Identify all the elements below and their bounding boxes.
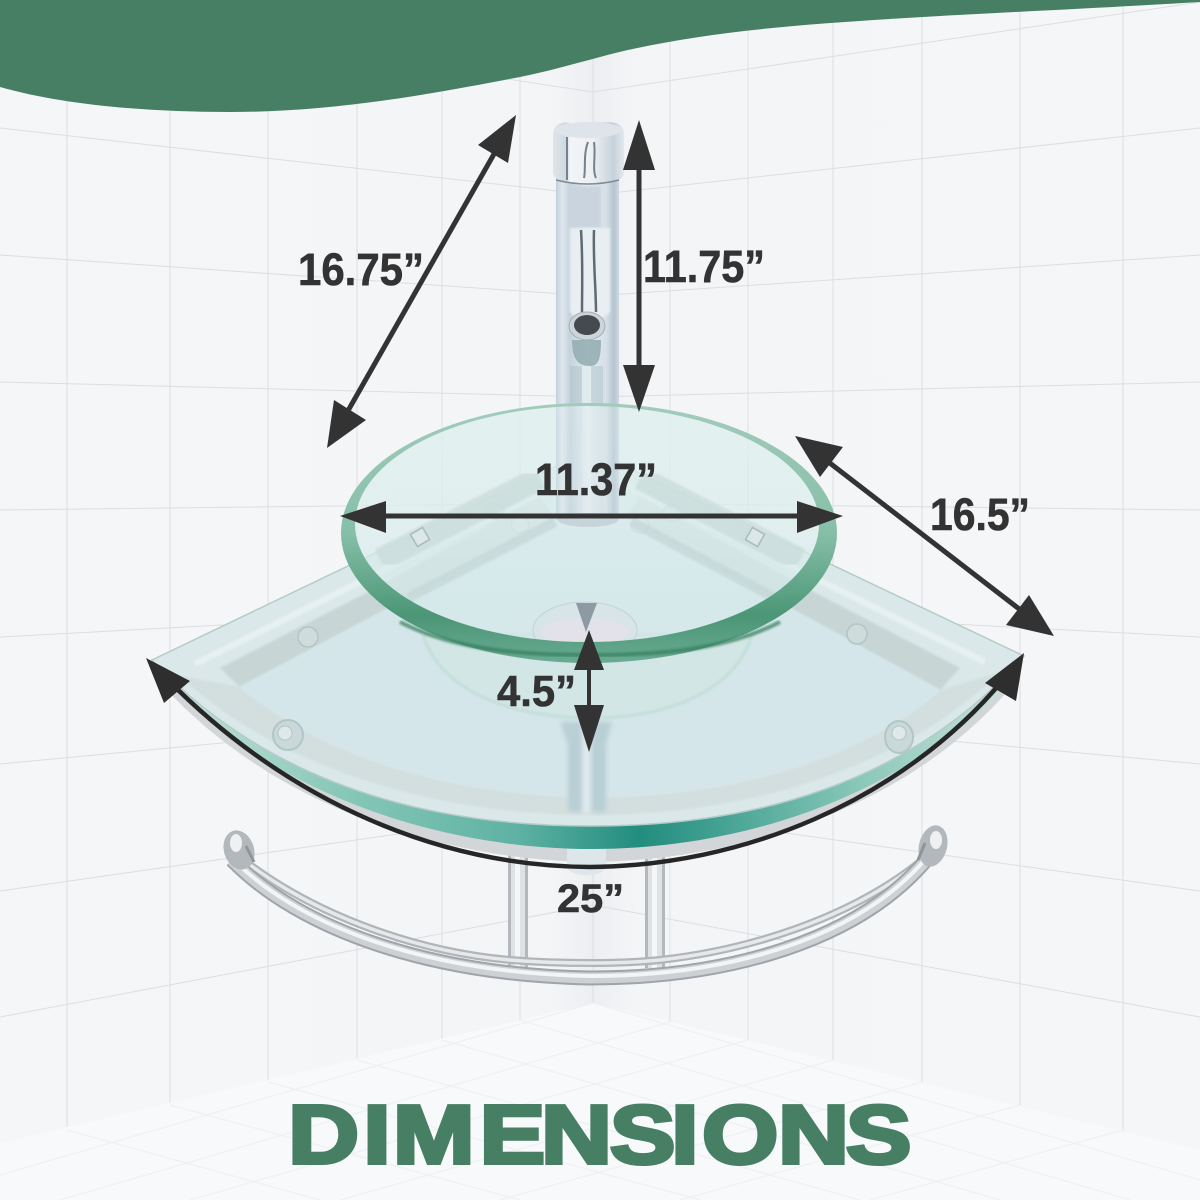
title: DIMENSIONS [288, 1089, 911, 1181]
faucet: handle stalk [581, 230, 596, 312]
arrow: bowl width 11.37 [340, 501, 843, 533]
bowl: visible frame through glass [380, 478, 800, 560]
shelf: straight steel band right [624, 496, 960, 690]
faucet: cap details [567, 137, 596, 180]
rail: inner tube [246, 862, 920, 963]
faucet: cap seam [556, 180, 619, 184]
arrow: bowl depth 4.5 [574, 630, 604, 752]
rail: outer tube [232, 856, 928, 978]
faucet: stem [556, 175, 619, 520]
towel rail [219, 822, 952, 978]
green wave header [0, 0, 1200, 112]
faucet: spout reflection [572, 340, 601, 366]
shelf: inner glass panel [240, 506, 940, 797]
rail: right ball end [914, 822, 952, 870]
faucet: cap top [554, 122, 622, 138]
shelf: steel underside [165, 670, 1012, 862]
shelf: screw left [273, 720, 303, 750]
rail: left ball end [219, 826, 259, 874]
bowl: dark front rim accent [400, 622, 780, 655]
shelf: straight steel band left [220, 496, 556, 687]
faucet: upper panel [569, 186, 601, 228]
label: 16.75: 16.75” [298, 244, 424, 295]
label: 16.5: 16.5” [930, 489, 1030, 540]
bowl: clips [410, 527, 765, 547]
bowl: interior [355, 405, 819, 645]
rail: support bars [508, 850, 665, 968]
label: 4.5: 4.5” [497, 667, 576, 716]
bowl: underside body [423, 635, 752, 718]
faucet [553, 122, 624, 520]
shelf: drain stub under shelf [567, 846, 606, 875]
faucet: white handle recess [570, 228, 610, 319]
arrow: faucet height 11.75 [623, 120, 655, 412]
arrow: side depth 16.5 [795, 436, 1054, 636]
background: tiled floor [0, 1003, 1200, 1200]
label: 11.75: 11.75” [643, 241, 765, 292]
bowl: faucet seen through [556, 405, 619, 527]
shelf: drain pipe below bowl [560, 722, 612, 812]
bowl: rim [341, 403, 837, 663]
faucet: aerator [569, 312, 605, 340]
shelf: teal front edge [150, 656, 1024, 849]
glass corner shelf [150, 450, 1024, 875]
shelf: curved steel band [180, 672, 1000, 815]
arrow: diagonal height 16.75 [327, 115, 516, 448]
shelf: glass top [152, 450, 1024, 826]
label: 11.37: 11.37” [535, 454, 657, 505]
shelf: frame highlights [195, 482, 985, 664]
glass vessel bowl [341, 403, 837, 718]
shelf: screw right [885, 721, 913, 753]
label: 25: 25” [557, 877, 624, 921]
arrow: front arc 25 [146, 653, 1024, 867]
bowl: drain [533, 602, 637, 658]
faucet: cap [553, 122, 624, 184]
shelf: back screws [298, 503, 867, 647]
faucet: base reflection [570, 366, 603, 520]
